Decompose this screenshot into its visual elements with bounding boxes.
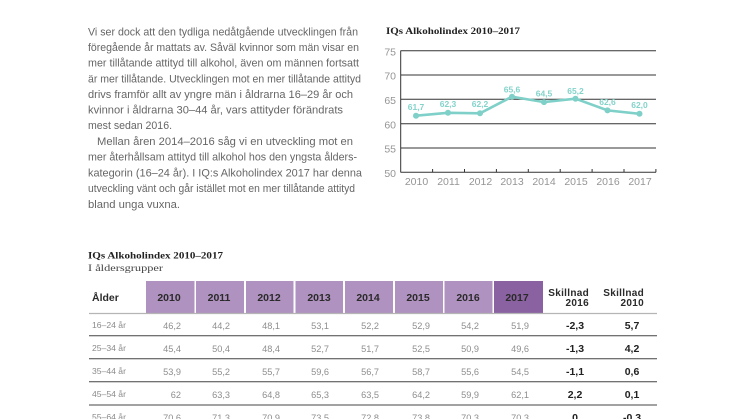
row 16–24: 52,9	[412, 321, 430, 331]
body text: Vi ser dock att den tydliga nedåtgående utvecklingen från	[88, 26, 358, 38]
table header: 2010	[621, 298, 644, 309]
row 25–34: 50,9	[461, 344, 479, 354]
table heading	[88, 252, 223, 274]
body text: drivs framför allt av yngre män i åldrarna 16–29 år och	[88, 89, 353, 101]
table header: 2017	[505, 292, 529, 304]
chart heading: IQs Alkoholindex 2010–2017	[386, 27, 520, 37]
row 55–64	[92, 412, 641, 419]
row 25–34: 48,4	[262, 344, 280, 354]
row 45–54: 64,2	[412, 390, 430, 400]
table header: 2016	[456, 292, 480, 304]
table header: 2013	[307, 292, 331, 304]
body text: föregående år mattats av. Såväl kvinnor som män visar en	[88, 42, 359, 54]
row 45–54: 65,3	[311, 390, 329, 400]
row 16–24: 5,7	[625, 320, 639, 332]
x axis labels: 2010	[405, 176, 428, 188]
row 16–24	[92, 320, 639, 332]
row 25–34: 51,7	[361, 344, 379, 354]
data table	[89, 281, 657, 419]
row 16–24: -2,3	[566, 320, 584, 332]
row 35–44: 0,6	[625, 366, 639, 378]
row 35–44: 55,7	[262, 367, 280, 377]
data labels: 62,6	[599, 97, 616, 107]
data labels: 65,6	[504, 84, 521, 94]
y axis labels: 50	[384, 168, 396, 180]
body text: kvinnor i åldrarna 30–44 år, vars attityder förändrats	[88, 104, 343, 116]
row 35–44: 55,6	[461, 367, 479, 377]
y axis labels: 75	[384, 46, 396, 58]
table header	[92, 281, 644, 313]
data labels: 61,7	[408, 102, 425, 112]
body text: utveckling vänt och går istället mot en mer tillåtande attityd	[88, 183, 355, 195]
table header: Skillnad	[603, 288, 644, 299]
row 25–34: 4,2	[625, 343, 639, 355]
row 45–54: 62,1	[511, 390, 529, 400]
row 35–44: 59,6	[311, 367, 329, 377]
row 35–44: 58,7	[412, 367, 430, 377]
x axis labels: 2013	[500, 176, 524, 188]
body text: mest sedan 2016.	[88, 120, 172, 132]
x axis labels: 2017	[628, 176, 652, 188]
row 25–34: 45,4	[163, 344, 181, 354]
body text: mer återhållsam attityd till alkohol hos den yngsta ålders-	[88, 152, 357, 164]
table header: Skillnad	[548, 288, 589, 299]
row 35–44	[92, 366, 639, 378]
data labels: 64,5	[536, 88, 553, 98]
row 16–24: 51,9	[511, 321, 529, 331]
row 45–54: 0,1	[625, 389, 639, 401]
table header: Ålder	[92, 291, 119, 304]
row 45–54: 62	[171, 390, 181, 400]
x axis labels: 2015	[564, 176, 588, 188]
data labels: 62,3	[440, 99, 457, 109]
y axis labels: 70	[384, 70, 396, 82]
row 16–24: 44,2	[212, 321, 230, 331]
row 25–34: -1,3	[566, 343, 584, 355]
row 45–54: 59,9	[461, 390, 479, 400]
row 35–44: 56,7	[361, 367, 379, 377]
data line	[413, 94, 642, 119]
y axis labels: 65	[384, 95, 396, 107]
line chart	[384, 46, 656, 188]
row 35–44: 35–44 år	[92, 366, 126, 376]
row 25–34: 25–34 år	[92, 343, 126, 353]
row 35–44: 53,9	[163, 367, 181, 377]
row 45–54: 45–54 år	[92, 389, 126, 399]
row 16–24: 48,1	[262, 321, 280, 331]
y axis labels: 55	[384, 144, 396, 156]
row 45–54	[92, 389, 639, 401]
table header: 2010	[157, 292, 181, 304]
body text: mer tillåtande attityd till alkohol, även om männen fortsatt	[88, 58, 360, 70]
body text: kategorin (16–24 år). I IQ:s Alkoholindex 2017 har denna	[88, 167, 363, 179]
table heading: IQs Alkoholindex 2010–2017	[88, 252, 223, 262]
row 16–24: 16–24 år	[92, 320, 126, 330]
x axis labels: 2011	[437, 176, 460, 188]
data labels	[408, 84, 648, 112]
row 16–24: 52,2	[361, 321, 379, 331]
body text: är mer tillåtande. Utvecklingen mot en mer tillåtande attityd	[88, 73, 361, 85]
row 16–24: 46,2	[163, 321, 181, 331]
row 16–24: 53,1	[311, 321, 329, 331]
table header: 2012	[257, 292, 281, 304]
table header: 2014	[356, 292, 380, 304]
data labels: 62,0	[631, 100, 648, 110]
row 35–44: 55,2	[212, 367, 230, 377]
x axis labels: 2016	[596, 176, 620, 188]
x axis labels: 2014	[532, 176, 556, 188]
table header: 2015	[406, 292, 430, 304]
data labels: 62,2	[472, 99, 489, 109]
row 25–34: 50,4	[212, 344, 230, 354]
x axis labels	[405, 176, 652, 188]
row 25–34: 52,7	[311, 344, 329, 354]
row 25–34: 49,6	[511, 344, 529, 354]
row 45–54: 63,3	[212, 390, 230, 400]
x axis labels: 2012	[469, 176, 492, 188]
row 25–34	[92, 343, 639, 355]
row 45–54: 64,8	[262, 390, 280, 400]
body text: bland unga vuxna.	[88, 199, 180, 211]
body text	[88, 26, 363, 211]
data labels: 65,2	[567, 86, 584, 96]
table heading: I åldersgrupper	[88, 263, 164, 274]
row 35–44: 54,5	[511, 367, 529, 377]
row 16–24: 54,2	[461, 321, 479, 331]
row 45–54: 63,5	[361, 390, 379, 400]
row 35–44: -1,1	[566, 366, 584, 378]
row 25–34: 52,5	[412, 344, 430, 354]
y axis labels	[384, 46, 396, 180]
table header: 2011	[208, 292, 231, 304]
row 45–54: 2,2	[568, 389, 582, 401]
y axis labels: 60	[384, 120, 396, 132]
table header: 2016	[566, 298, 589, 309]
body text: Mellan åren 2014–2016 såg vi en utveckling mot en	[97, 136, 353, 148]
